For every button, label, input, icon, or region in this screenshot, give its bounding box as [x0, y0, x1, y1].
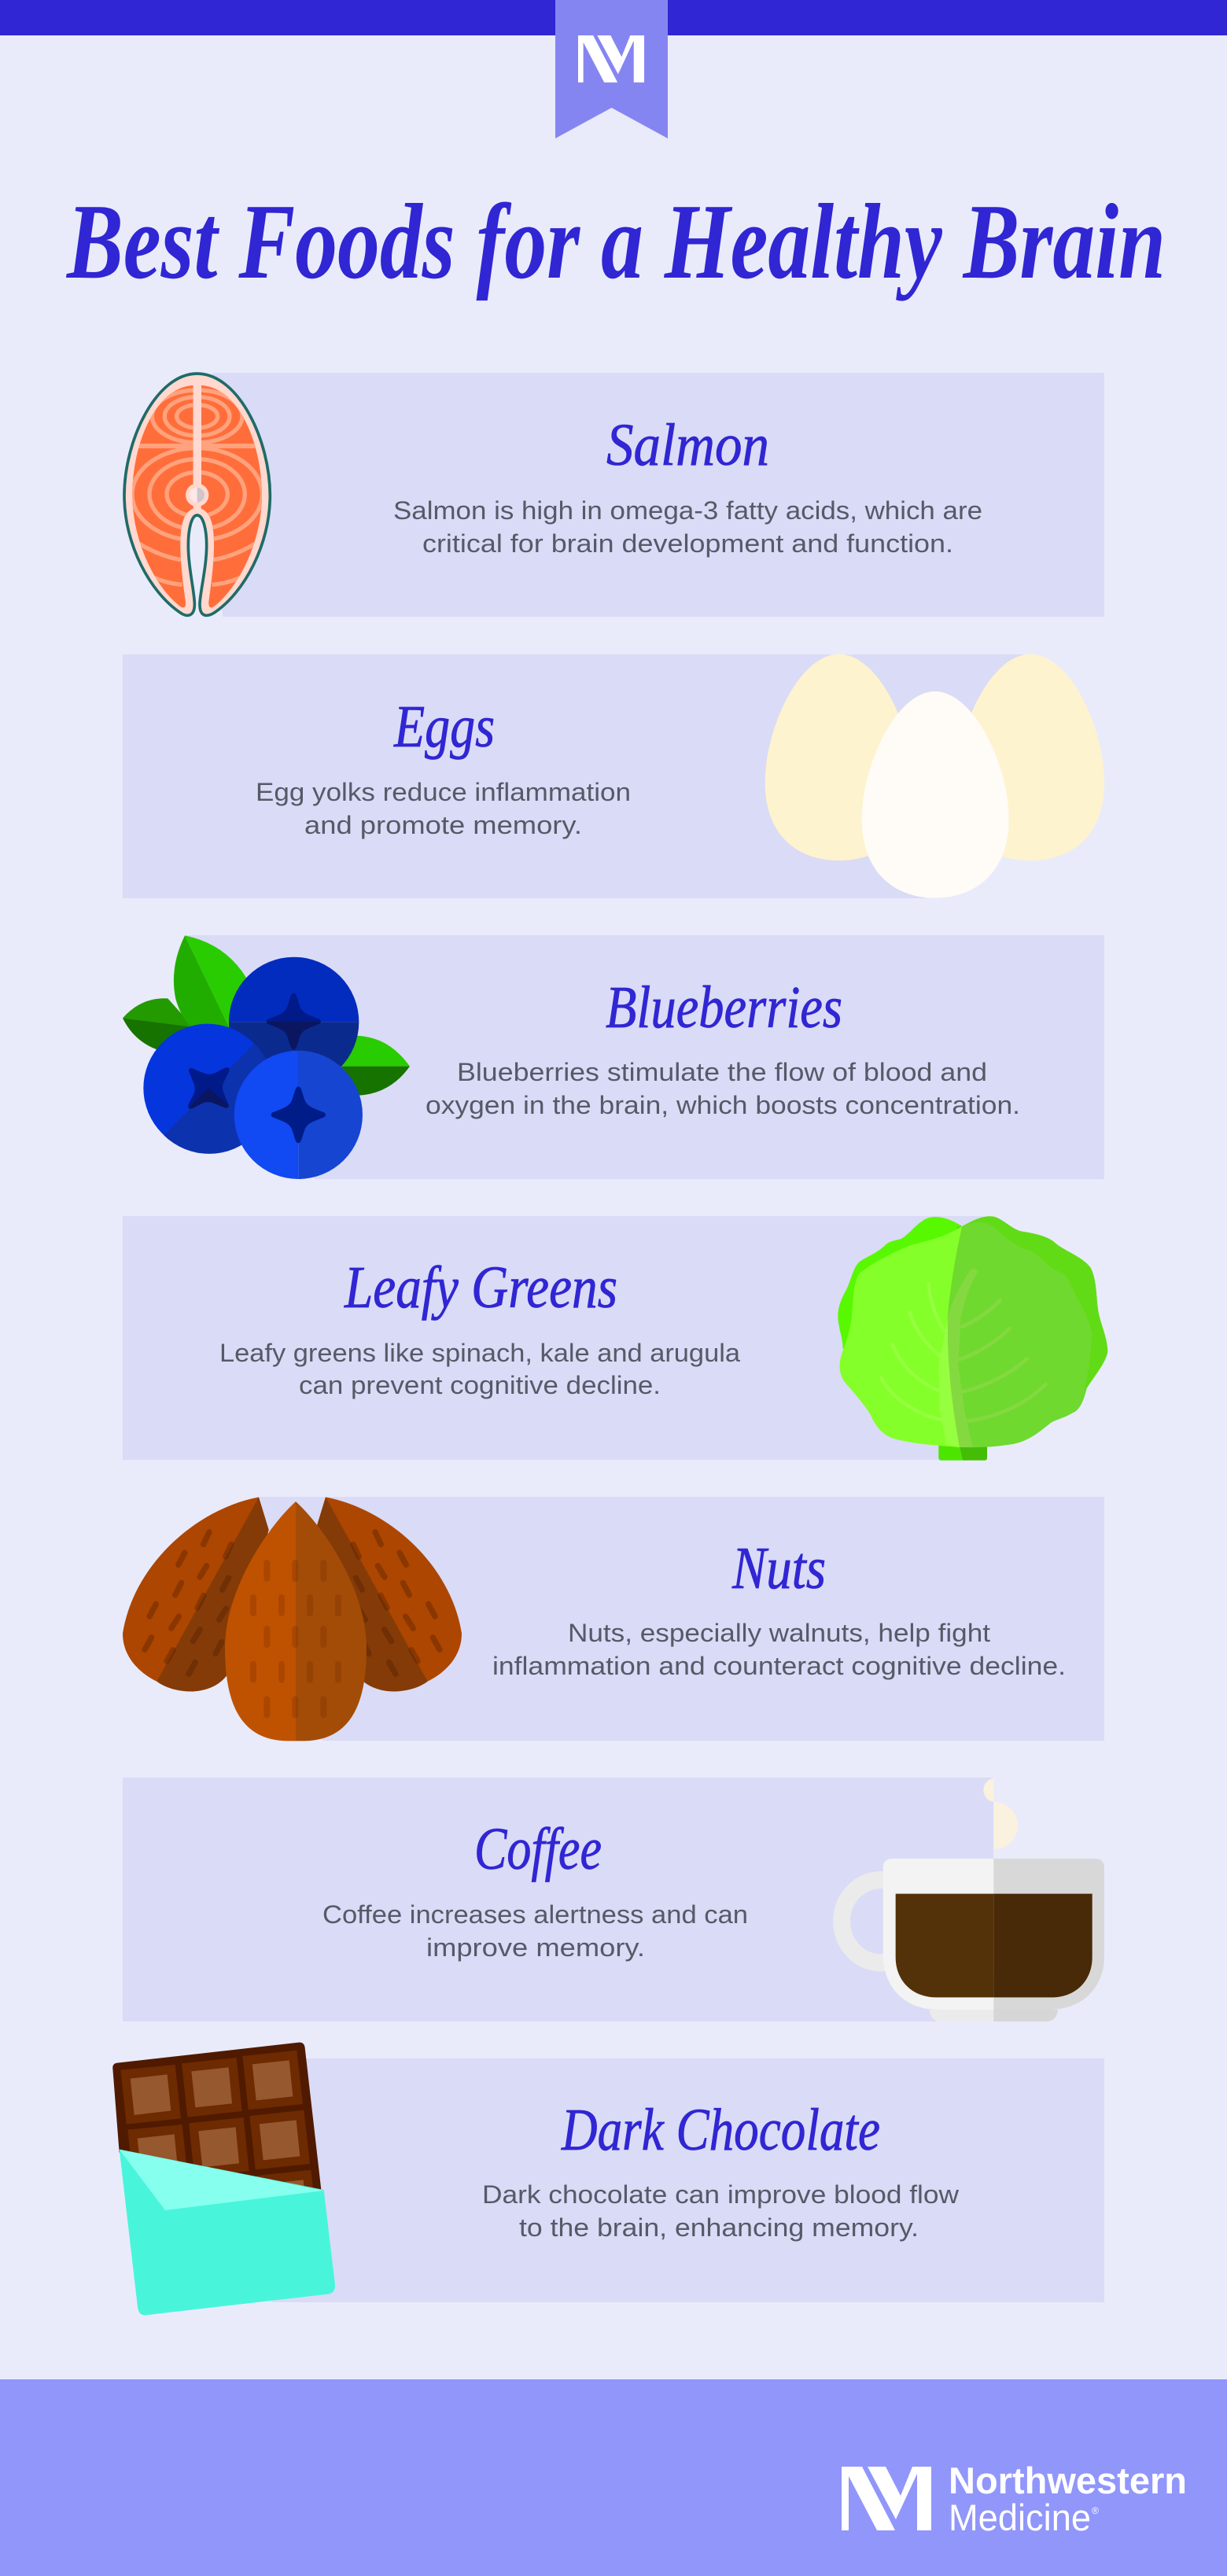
panel background	[123, 1216, 983, 1460]
heading: Eggs	[393, 694, 495, 760]
heading: Dark Chocolate	[561, 2097, 880, 2163]
icon: coffee cup	[842, 1778, 1104, 2021]
description	[256, 778, 631, 839]
panel background	[271, 2058, 1104, 2302]
heading: Leafy Greens	[344, 1255, 617, 1321]
footer	[0, 2379, 1227, 2576]
description: and promote memory.	[304, 811, 582, 839]
description	[219, 1339, 740, 1399]
icon: almonds	[123, 1497, 462, 1741]
panel: eggs	[123, 654, 1104, 898]
logo text: ®	[1092, 2505, 1099, 2516]
description: Nuts, especially walnuts, help fight	[568, 1619, 990, 1647]
icon: lettuce	[838, 1216, 1107, 1461]
icon: Northwestern Medicine logo	[842, 2467, 931, 2530]
logo text: Medicine	[949, 2497, 1091, 2538]
description: Dark chocolate can improve blood flow	[482, 2180, 960, 2209]
panel: coffee	[123, 1778, 1104, 2021]
description: critical for brain development and function.	[422, 529, 953, 558]
panel: leafy greens	[123, 1216, 1107, 1461]
description	[426, 1058, 1020, 1119]
ribbon with logo	[555, 0, 668, 138]
description	[482, 2180, 960, 2242]
description	[322, 1900, 748, 1962]
icon: salmon steak	[124, 374, 270, 615]
description: Coffee increases alertness and can	[322, 1900, 748, 1929]
panel: dark chocolate	[112, 2043, 1104, 2315]
panel: blueberries	[123, 935, 1104, 1179]
description: inflammation and counteract cognitive decline.	[492, 1652, 1066, 1680]
panel background	[123, 1778, 993, 2021]
icon: blueberries	[123, 935, 410, 1179]
panel background	[260, 1497, 1104, 1741]
description: Blueberries stimulate the flow of blood and	[457, 1058, 987, 1086]
description: Salmon is high in omega-3 fatty acids, which are	[393, 496, 982, 525]
description: Egg yolks reduce inflammation	[256, 778, 631, 806]
header bar	[0, 0, 1227, 35]
icon: chocolate bar	[112, 2043, 335, 2315]
panel: nuts	[123, 1497, 1104, 1741]
description	[393, 496, 982, 558]
panel: salmon	[124, 373, 1104, 617]
heading: Blueberries	[606, 975, 842, 1041]
description: to the brain, enhancing memory.	[519, 2213, 919, 2242]
description	[492, 1619, 1066, 1680]
logo text	[949, 2460, 1187, 2538]
description: Leafy greens like spinach, kale and arugula	[219, 1339, 740, 1367]
logo text: Northwestern	[949, 2460, 1187, 2501]
panel background	[185, 935, 1104, 1179]
heading: Nuts	[731, 1535, 826, 1601]
icon: eggs	[765, 654, 1104, 898]
panel background	[212, 373, 1104, 617]
panel background	[123, 654, 1025, 898]
icon: NM logo	[578, 35, 644, 83]
heading: Coffee	[474, 1816, 602, 1882]
heading: Salmon	[606, 412, 769, 478]
description: improve memory.	[426, 1933, 645, 1962]
description: can prevent cognitive decline.	[299, 1371, 661, 1399]
description: oxygen in the brain, which boosts concentration.	[426, 1091, 1020, 1119]
